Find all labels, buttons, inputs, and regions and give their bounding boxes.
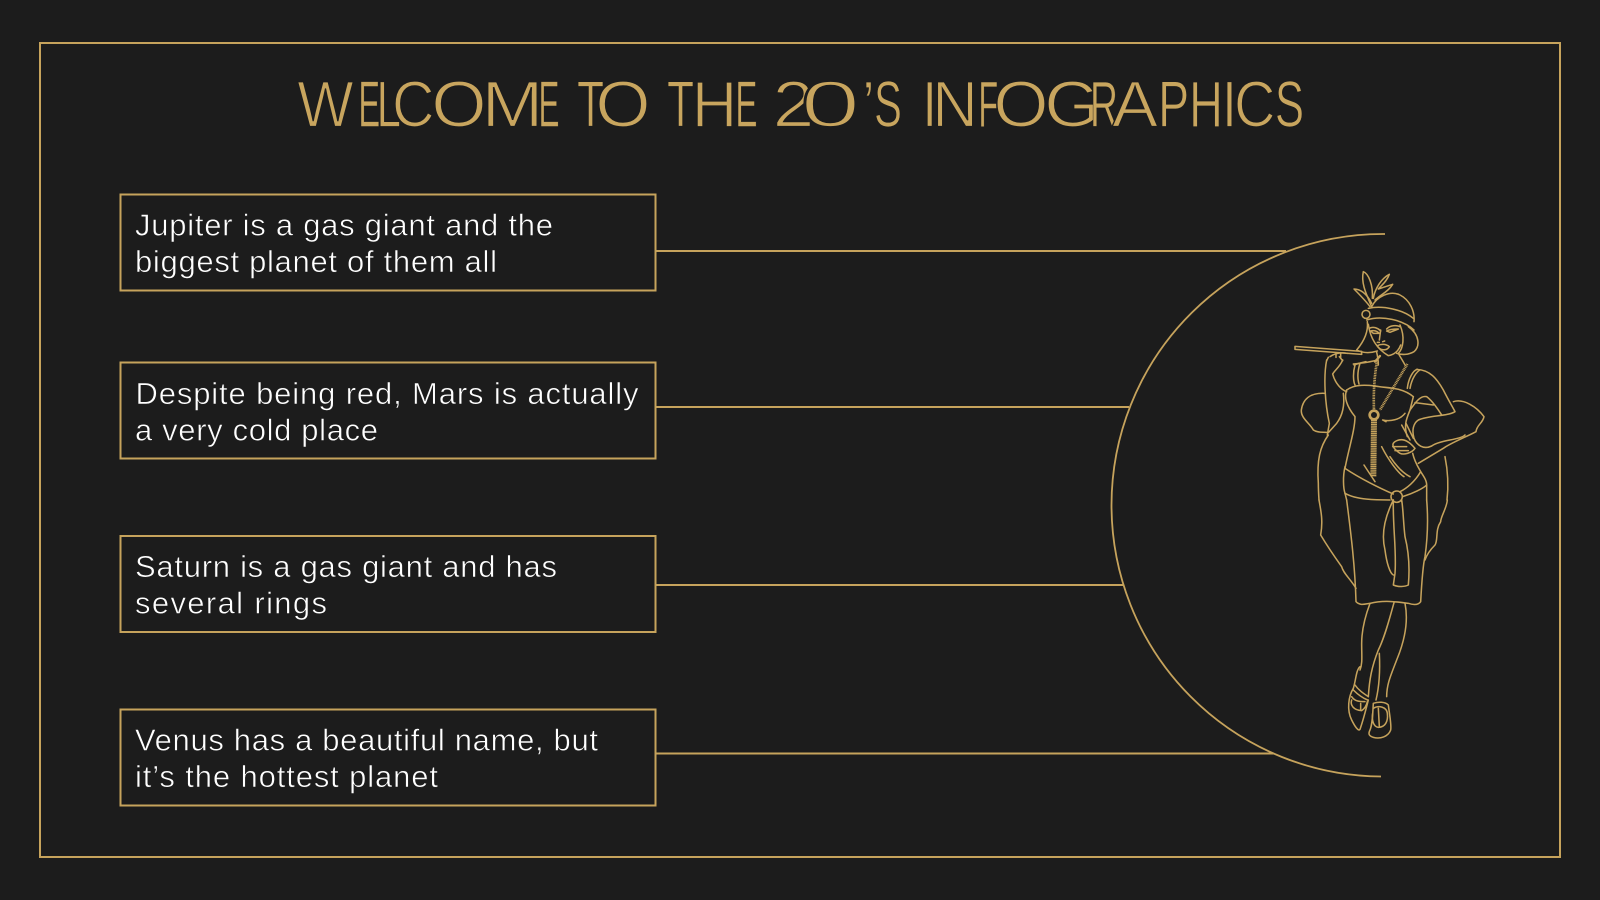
connector lines [656, 251, 1286, 754]
title: S [1275, 68, 1304, 141]
title: E [735, 67, 758, 140]
illustration: flapper woman [1295, 272, 1484, 738]
title: A [1112, 68, 1158, 141]
illustration part: skirt, legs and shoes [1319, 500, 1447, 738]
title: L [377, 68, 401, 141]
semicircle arc [1112, 234, 1385, 776]
title: R [1090, 68, 1118, 141]
title: F [978, 67, 998, 140]
title: O [596, 69, 650, 141]
panel: Venus text box: Venus has a beautiful name, but [135, 722, 598, 758]
title: E [538, 68, 559, 141]
illustration part: head and hat [1354, 272, 1418, 365]
panel: Jupiter text box [120, 194, 656, 290]
panel: Saturn text box [120, 536, 656, 632]
illustration part: torso and sleeves [1301, 360, 1484, 502]
title: I [922, 67, 937, 141]
title: N [932, 68, 978, 141]
title: C [1234, 68, 1275, 140]
title: 2 [773, 68, 814, 140]
illustration part: cigarette holder and hand [1295, 346, 1380, 365]
panel: Saturn text box: several rings [135, 586, 327, 620]
panel: Mars text box: a very cold place [135, 412, 378, 448]
panel: Jupiter text box: Jupiter is a gas giant and the [135, 208, 553, 242]
title: W [297, 69, 354, 141]
title: P [1158, 68, 1189, 140]
title: T [577, 68, 604, 141]
title: T [667, 68, 694, 141]
title [297, 67, 1304, 141]
title: H [692, 67, 737, 141]
panel: Jupiter text box: biggest planet of them all [135, 244, 497, 279]
title: H [1189, 68, 1223, 140]
title: C [392, 69, 434, 141]
title: O [432, 69, 486, 141]
title: E [358, 67, 380, 140]
title: S [874, 68, 902, 141]
panel: Venus text box: it’s the hottest planet [135, 759, 438, 794]
panel: Mars text box: Despite being red, Mars is actually [136, 376, 639, 411]
panel: Venus text box [120, 710, 656, 806]
panel: Saturn text box: Saturn is a gas giant and has [135, 549, 557, 584]
title: 0 [801, 68, 860, 140]
title: M [482, 68, 543, 140]
panel: Mars text box [120, 362, 656, 458]
title: O [994, 69, 1048, 141]
title: I [1222, 68, 1236, 141]
title: G [1044, 68, 1100, 141]
title: ’ [862, 69, 875, 141]
